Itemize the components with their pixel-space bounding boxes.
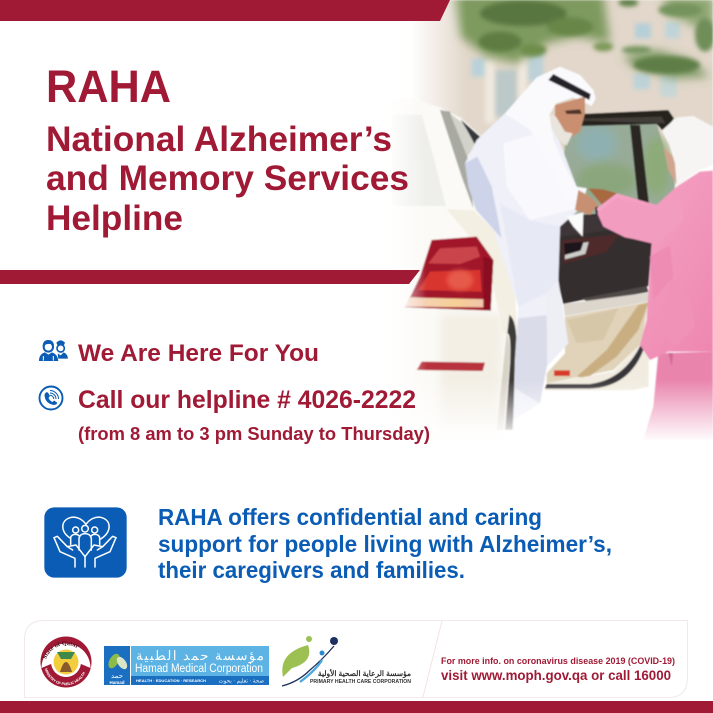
- logo: Hamad Medical Corporation: مؤسسة حمد الطبية: [136, 648, 264, 664]
- woman: pink jacket and trousers: [597, 171, 713, 450]
- subtitle line 3: Helpline: [46, 198, 183, 238]
- footer info text: [441, 656, 675, 683]
- footer info text: For more info. on coronavirus disease 2019 (COVID-19): [441, 656, 675, 667]
- logo: Primary Health Care Corporation: PRIMARY HEALTH CARE CORPORATION: [310, 679, 411, 685]
- logo: Hamad Medical Corporation: حمد: [111, 673, 123, 680]
- blue description text: [158, 504, 612, 583]
- hands clasped and tissue: [567, 188, 617, 237]
- logo: Ministry of Public Health seal: MINISTRY OF PUBLIC HEALTH: [44, 668, 86, 686]
- subtitle line 1: National Alzheimer’s: [46, 119, 392, 159]
- text: helpline number: Call our helpline # 4026-2222: [78, 386, 416, 414]
- open car door beige lining: [545, 302, 649, 391]
- car body: [403, 105, 518, 424]
- icon: medical staff: [39, 340, 68, 361]
- description line 2: support for people living with Alzheimer’s,: [158, 531, 612, 557]
- car tail light: [405, 237, 493, 311]
- car bumper reflector: [417, 362, 485, 371]
- logo: Hamad Medical Corporation: Hamad: [109, 680, 125, 685]
- title: RAHA: RAHA: [46, 61, 171, 112]
- logo: Hamad Medical Corporation: صحة · تعليم · بحوث: [219, 678, 264, 684]
- description line 3: their caregivers and families.: [158, 557, 465, 583]
- man: white thobe: [465, 113, 587, 420]
- text: opening hours: (from 8 am to 3 pm Sunday to Thursday): [78, 424, 430, 444]
- car wheel arch and tyre: [505, 315, 517, 430]
- footer panel: [24, 620, 688, 698]
- logo: Primary Health Care Corporation: مؤسسة الرعاية الصحية الأولية: [318, 667, 411, 679]
- woman: white headscarf and face: [662, 116, 713, 186]
- icon: phone helpline: [40, 386, 62, 410]
- open car door window glass and frame: [560, 110, 675, 217]
- logo: Hamad Medical Corporation: HEALTH · EDUCATION · RESEARCH: [136, 678, 206, 683]
- photo background: blurred building and trees: [419, 0, 713, 156]
- open car door panel: [558, 213, 653, 316]
- logo: Primary Health Care Corporation: [282, 636, 411, 686]
- title block: [46, 61, 409, 238]
- text: we are here for you: We Are Here For You: [78, 340, 319, 367]
- description line 1: RAHA offers confidential and caring: [158, 504, 542, 530]
- logo: Ministry of Public Health seal: State of Qatar: [42, 640, 79, 660]
- middle red banner: [0, 270, 420, 284]
- logo: Hamad Medical Corporation: Hamad Medical Corporation: [135, 663, 263, 675]
- logo: Ministry of Public Health seal: [40, 636, 92, 688]
- logo: Hamad Medical Corporation: [104, 646, 269, 685]
- icon: caring hands around family in heart: [44, 507, 127, 578]
- top red banner: [0, 0, 450, 21]
- photo: man being helped out of a car by a woman in pink: [387, 0, 713, 450]
- subtitle line 2: and Memory Services: [46, 158, 409, 198]
- man: ghutra headscarf, face and agal: [505, 66, 596, 187]
- footer info text: visit www.moph.gov.qa or call 16000: [441, 667, 671, 683]
- bottom red banner: [0, 701, 713, 713]
